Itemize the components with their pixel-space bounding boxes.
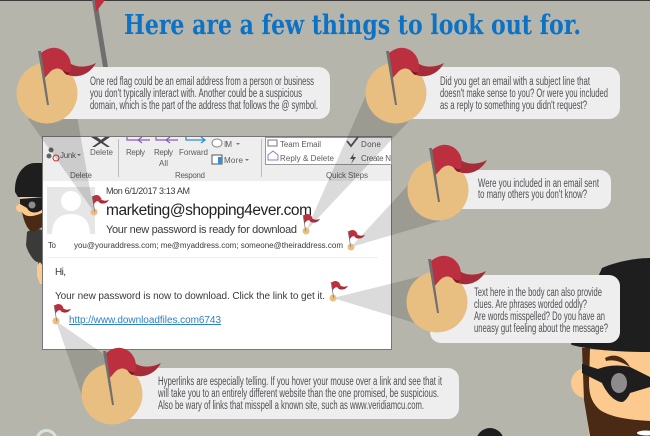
email window	[42, 136, 392, 350]
ribbon labels: Junk	[60, 151, 77, 160]
callout: body text: clues. Are phrases worded oddly?	[474, 299, 587, 311]
message header: Mon 6/1/2017 3:13 AM	[106, 186, 190, 196]
email window: Your new password is ready for download	[106, 224, 297, 236]
callout: subject line	[302, 48, 620, 235]
callout: sender address	[16, 48, 330, 216]
callout: hyperlinks: Also be wary of links that misspell a known site, such as www.veridiamcu.com.	[158, 400, 424, 412]
callout: sender address: you don't typically interact with. Another could be a suspicious	[90, 88, 302, 100]
callout: recipients	[348, 145, 611, 250]
ribbon: Reply	[126, 148, 145, 157]
callout: sender address: One red flag could be an email address from a person or business	[90, 76, 314, 88]
thief peeking left	[15, 163, 47, 285]
callout: body text	[330, 256, 620, 343]
link: http://www.downloadfiles.com6743	[69, 315, 221, 326]
ribbon icons	[91, 137, 110, 147]
ribbon: Reply & Delete	[280, 154, 335, 163]
ribbon: IM	[224, 140, 232, 149]
ribbon: Delete	[70, 171, 93, 180]
ribbon: All	[159, 159, 168, 168]
bottom circle black	[476, 428, 504, 436]
ribbon: Team Email	[280, 140, 321, 149]
ribbon: More	[224, 156, 244, 165]
ribbon: Done	[361, 140, 382, 149]
ribbon: Reply	[154, 148, 173, 157]
email window: To	[48, 241, 57, 250]
email window: marketing@shopping4ever.com	[106, 202, 312, 219]
partial flag at top	[92, 0, 108, 67]
callout: hyperlinks: Hyperlinks are especially telling. If you hover your mouse over a link and see that it	[158, 376, 443, 388]
callout: hyperlinks	[52, 304, 459, 424]
ribbon: Create N	[361, 154, 391, 163]
email window: Your new password is now to download. Click the link to get it.	[55, 291, 325, 302]
callout: sender address: domain, which is the part of the address that follows the @ symbol.	[90, 100, 318, 112]
message body: Hi,	[55, 267, 66, 278]
callout: recipients: to many others you don't know?	[478, 189, 587, 201]
ribbon	[43, 137, 392, 181]
ribbon: Delete	[90, 148, 114, 157]
thief peeking right	[571, 258, 650, 436]
ribbon: Forward	[179, 148, 208, 157]
ribbon: Quick Steps	[326, 171, 368, 180]
callout: hyperlinks: will take you to an entirely different website than the one promised, be suspicious.	[157, 388, 439, 400]
avatar	[47, 187, 95, 234]
email window: you@youraddress.com; me@myaddress.com; someone@theiraddress.com	[74, 241, 343, 250]
bottom ring	[37, 430, 56, 436]
ribbon: Respond	[175, 171, 205, 180]
